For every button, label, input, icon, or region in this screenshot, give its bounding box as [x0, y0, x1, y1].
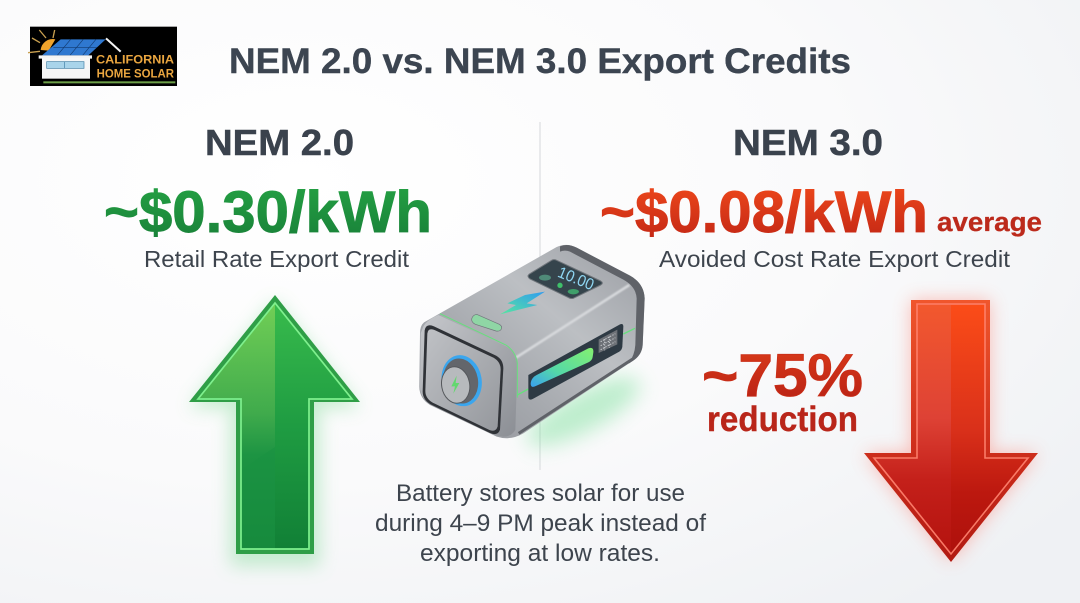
illustration: battery [419, 245, 649, 459]
panel: NEM 2.0 [104, 122, 432, 566]
callout: battery note: Battery stores solar for use [396, 480, 685, 507]
logo wordmark line 1: CALIFORNIA [96, 52, 174, 66]
logo wordmark line 2: HOME SOLAR [97, 66, 174, 80]
title: NEM 2.0 vs. NEM 3.0 Export Credits [229, 42, 851, 81]
callout: battery note [375, 480, 706, 567]
heading: NEM 2.0: NEM 2.0 [205, 122, 354, 163]
caption: retail rate: Retail Rate Export Credit [144, 246, 409, 272]
caption: avoided cost rate: Avoided Cost Rate Export Credit [659, 246, 1010, 272]
rate: NEM 3.0 credit: ~$0.08/kWh [600, 180, 928, 245]
rate: NEM 2.0 credit: ~$0.30/kWh [104, 180, 432, 245]
stat: 75 percent reduction [702, 342, 863, 439]
panel: NEM 3.0 [600, 122, 1042, 562]
icon: red down arrow [864, 300, 1038, 562]
callout: battery note: exporting at low rates. [420, 540, 660, 567]
icon: green up arrow [189, 295, 360, 566]
heading: NEM 3.0: NEM 3.0 [733, 122, 883, 163]
stat: 75 percent reduction: ~75% [702, 342, 863, 409]
center divider [539, 122, 541, 470]
stat: 75 percent reduction: reduction [707, 400, 858, 439]
callout: battery note: during 4–9 PM peak instead of [375, 510, 706, 537]
label: average: average [937, 207, 1042, 237]
logo: California Home Solar [28, 27, 177, 86]
battery display readout: 10.00 [555, 264, 596, 294]
